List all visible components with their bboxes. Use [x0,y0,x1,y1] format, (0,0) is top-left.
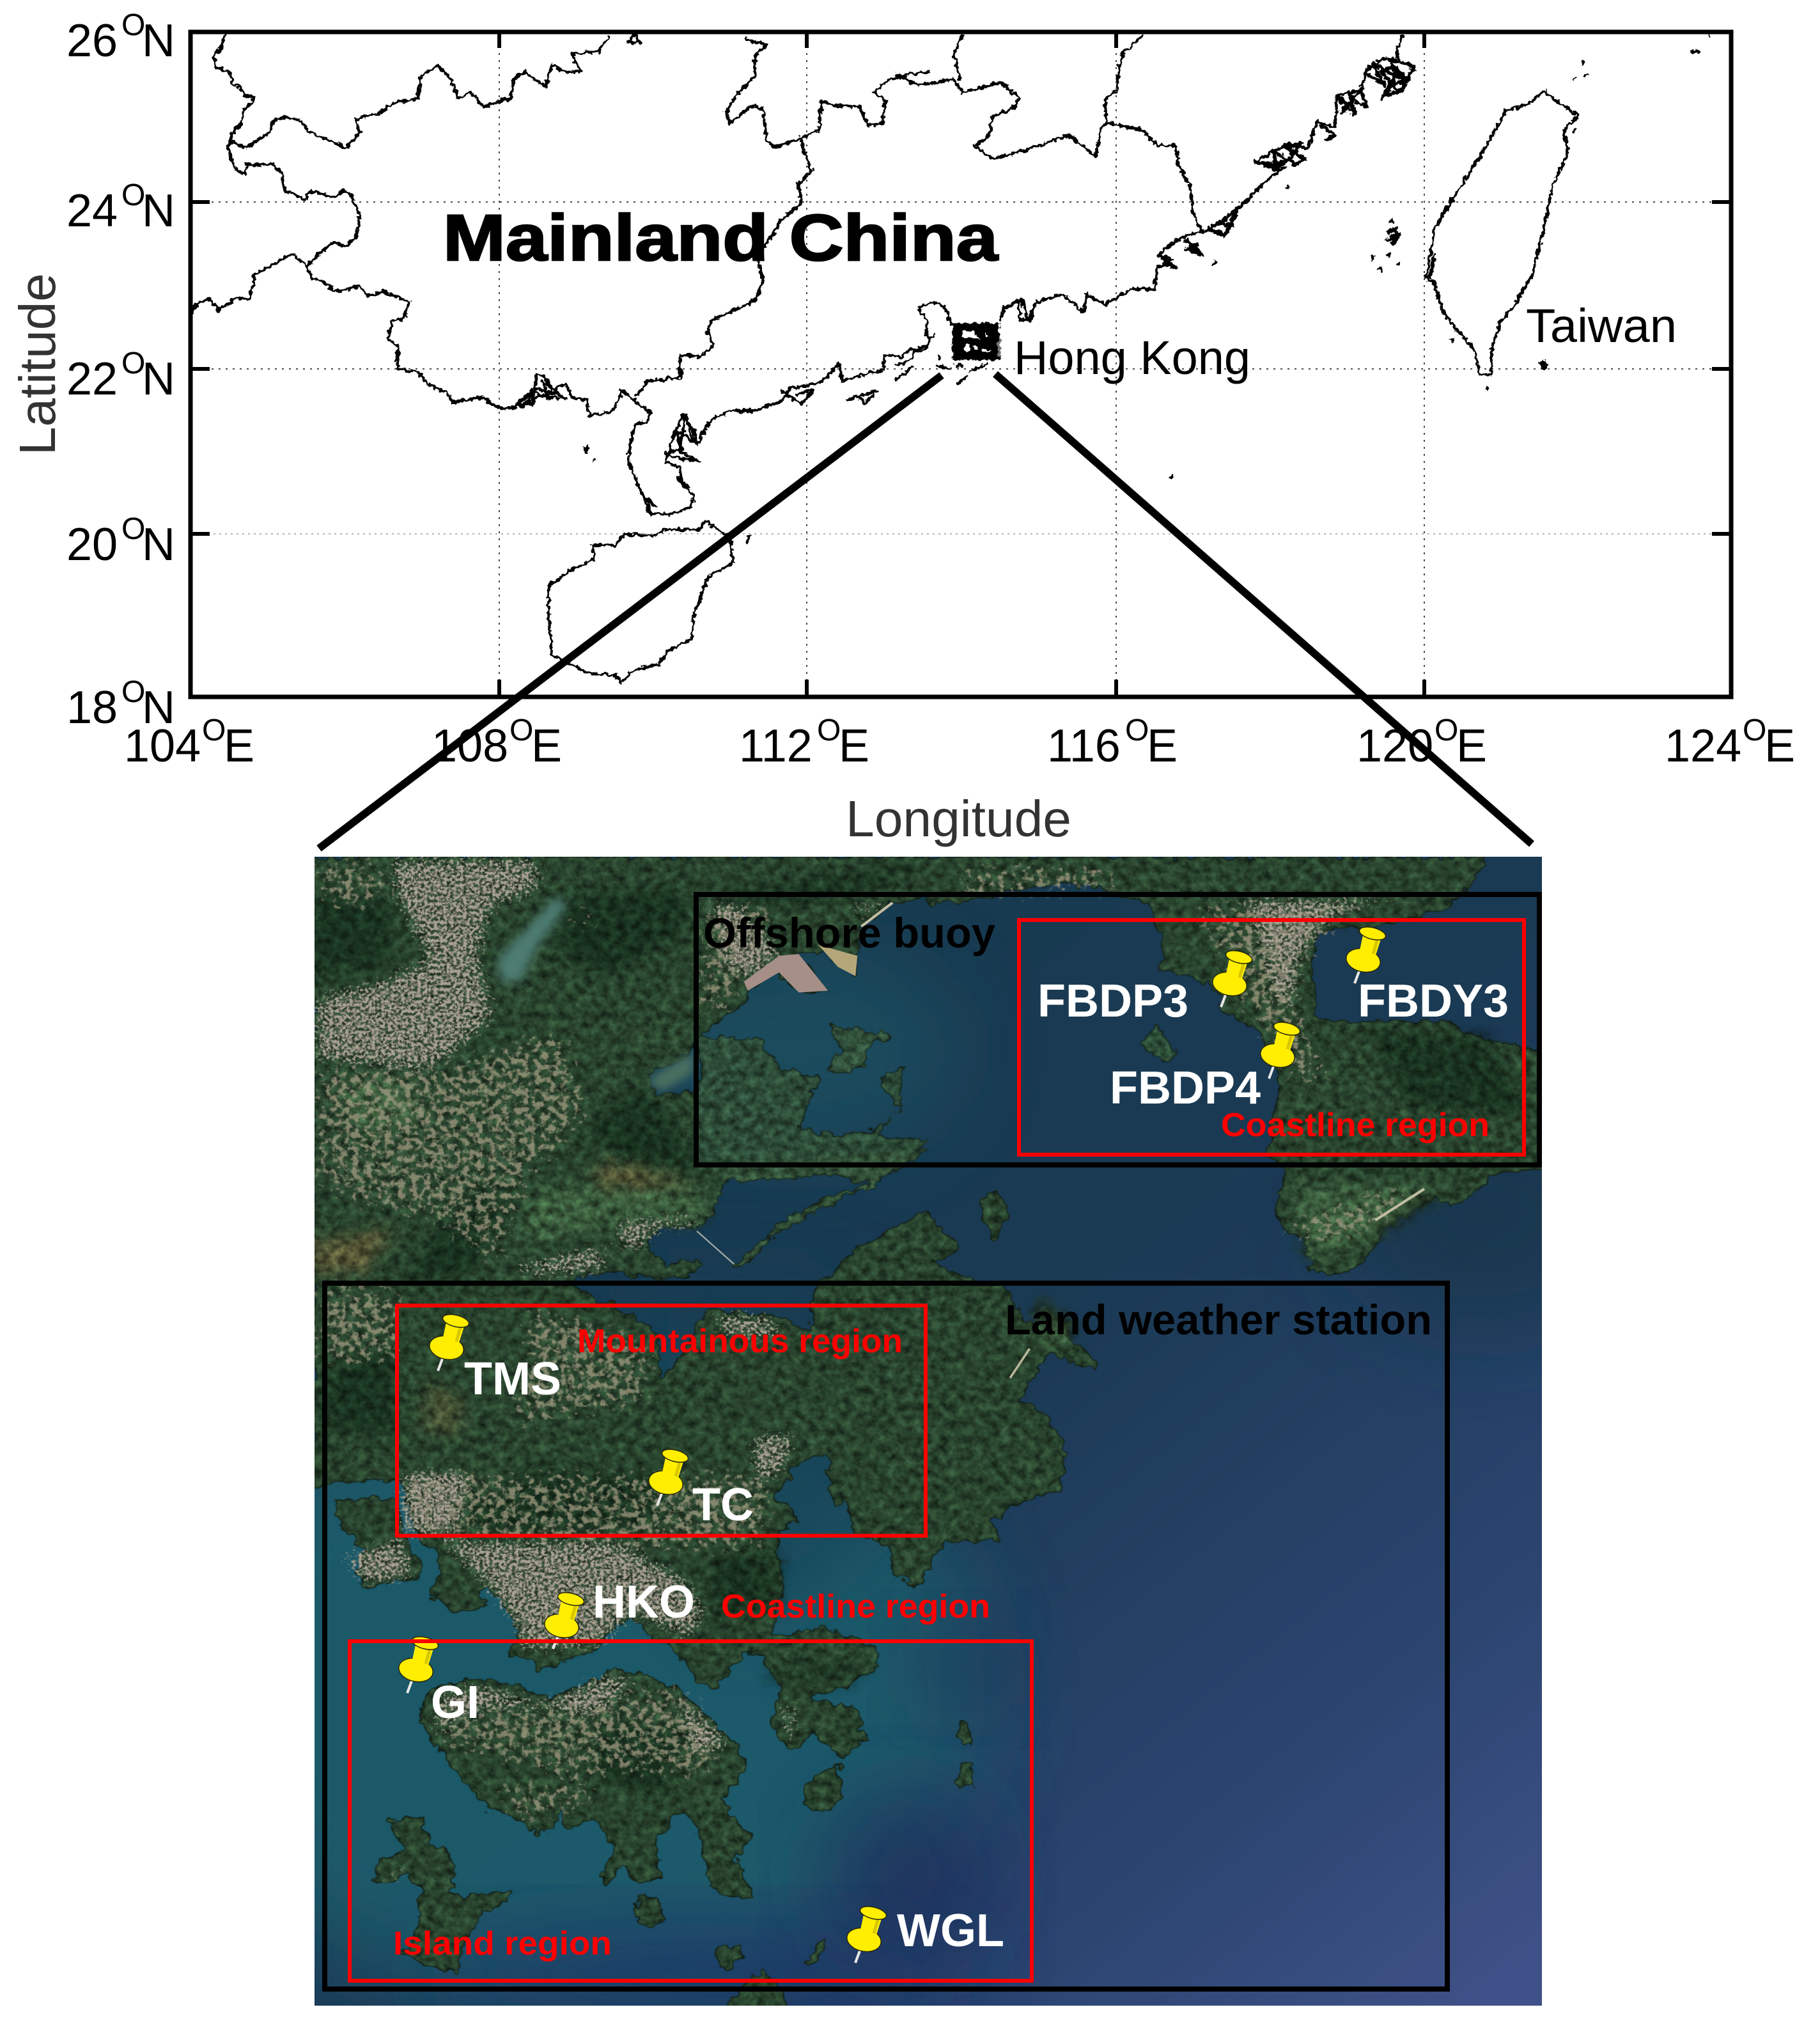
latitude tick labels: 22 [66,354,118,405]
Hainan island [548,520,733,683]
station label: FBDY3: FBDY3 [1358,976,1509,1027]
box: island region [350,1641,1032,1981]
box: offshore buoy [696,894,1539,1165]
dark forest [313,864,1527,1797]
latitude tick labels: O [121,178,145,212]
longitude tick labels: 124 [1665,721,1741,772]
latitude tick labels: O [121,8,145,42]
latitude tick labels: N [142,519,175,570]
station label: WGL: WGL [897,1905,1004,1956]
pin: WGL [844,1904,888,1963]
longitude tick labels: O [817,714,841,747]
axis ticks [191,32,1731,697]
latitude tick labels: 20 [66,519,118,570]
longitude tick labels: E [839,721,869,772]
lighter vegetation [337,1073,1449,1348]
station label: FBDP4: FBDP4 [1110,1063,1261,1114]
longitude tick labels: E [224,721,254,772]
station label: FBDP3: FBDP3 [1038,976,1188,1027]
y axis title: Latitude [9,273,66,455]
latitude tick labels: 18 [66,682,118,733]
label: Mainland China: Mainland China [443,201,999,274]
map grid lines [191,32,1731,697]
label: Land weather station: Land weather station [1005,1296,1432,1343]
map frame [191,32,1731,697]
longitude tick labels: 104 [124,721,201,772]
label: Taiwan: Taiwan [1526,299,1677,352]
longitude tick labels: E [531,721,562,772]
pin: FBDP4 [1258,1020,1302,1079]
reservoirs and beaches [497,897,568,981]
latitude tick labels [66,8,175,733]
map: coastlines and province boundaries [192,34,1711,683]
longitude tick labels: O [1743,714,1766,747]
longitude tick labels: 108 [432,721,508,772]
longitude tick labels: 120 [1357,721,1433,772]
land masses [313,857,1541,2009]
longitude tick labels: O [1125,714,1149,747]
box: mountainous region [397,1306,926,1536]
latitude tick labels: N [142,185,175,237]
latitude tick labels: O [121,347,145,380]
latitude tick labels: N [142,682,175,733]
station label: TMS: TMS [464,1354,561,1405]
suburban sprawl [313,857,1449,1888]
longitude tick labels: 116 [1047,721,1121,772]
label: Coastline region offshore: Coastline region [1221,1107,1489,1144]
label: Hong Kong: Hong Kong [1014,331,1250,384]
station label: TC: TC [692,1479,754,1531]
pin: TC [646,1447,690,1506]
sea background [166,857,1624,2021]
longitude tick labels: E [1456,721,1487,772]
longitude tick labels: E [1147,721,1178,772]
label: Coastline region land: Coastline region [721,1588,990,1625]
station label: GI: GI [431,1677,479,1728]
latitude tick labels: N [142,354,175,405]
label: Mountainous region: Mountainous region [577,1323,903,1360]
x axis title: Longitude [846,790,1071,847]
longitude tick labels [124,714,1795,772]
longitude tick labels: O [1435,714,1458,747]
longitude tick labels: E [1764,721,1795,772]
Taiwan island [1426,91,1578,375]
box: land weather station [325,1283,1447,1989]
label: Island region: Island region [393,1925,612,1962]
latitude tick labels: N [142,15,175,66]
brown hillsides [313,1165,701,1432]
latitude tick labels: O [121,675,145,709]
latitude tick labels: O [121,512,145,546]
pin: HKO [542,1590,586,1649]
longitude tick labels: O [509,714,533,747]
latitude tick labels: 26 [66,15,118,66]
box: offshore coastline region [1019,920,1524,1155]
longitude tick labels: O [202,714,226,747]
station label: HKO: HKO [593,1577,695,1628]
container port and reclaimed sand [744,945,857,992]
urban areas [313,857,1410,1759]
pin: FBDP3 [1210,948,1254,1007]
zoom connector arrow lines [319,374,1532,848]
longitude tick labels: 112 [739,721,813,772]
panel: regional map [9,8,1795,847]
pin: TMS [427,1312,471,1371]
panel: satellite image of Hong Kong [166,857,1624,2021]
pin: GI [396,1634,440,1693]
pin: FBDY3 [1344,925,1387,983]
label: Offshore buoy: Offshore buoy [703,909,995,956]
Hong Kong location marker [895,302,1034,386]
latitude tick labels: 24 [66,185,118,237]
